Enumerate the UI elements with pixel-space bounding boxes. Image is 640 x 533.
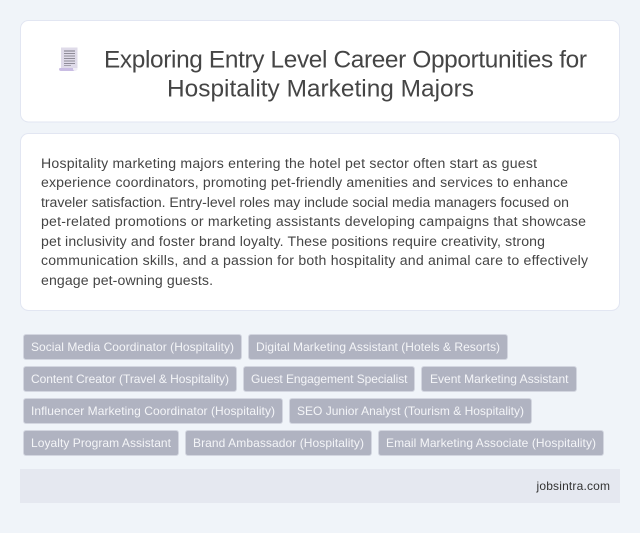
title: Hospitality Marketing Majors (167, 76, 474, 102)
tag (24, 334, 242, 360)
title (104, 46, 587, 102)
tag: Email Marketing Associate (Hospitality) (386, 436, 596, 450)
tag (24, 398, 282, 424)
text block: description: pet inclusivity and foster brand loyalty. These positions require creativity, strong (41, 233, 545, 249)
tag: Content Creator (Travel & Hospitality) (31, 372, 229, 386)
footer (20, 469, 620, 503)
text block: description: pet-related promotions or marketing assistants developing campaigns that showcase (41, 213, 586, 229)
tag (24, 366, 236, 392)
text block: description: communication skills, and a passion for both hospitality and animal care to effectively (41, 252, 589, 268)
tag (186, 430, 372, 456)
panel: header (20, 20, 620, 122)
tag (248, 334, 508, 360)
text block: description: traveler satisfaction. Entry-level roles may include social media managers focused on (41, 194, 569, 210)
text block: description: Hospitality marketing majors entering the hotel pet sector often start as guest (41, 155, 537, 171)
title: Exploring Entry Level Career Opportunities for (104, 46, 587, 74)
text block: description: experience coordinators, promoting pet-friendly amenities and services to enhance (41, 174, 568, 190)
footer text: jobsintra.com (536, 479, 610, 493)
tag: Brand Ambassador (Hospitality) (193, 436, 364, 450)
tag: Loyalty Program Assistant (31, 436, 172, 450)
text block: description: engage pet-owning guests. (41, 272, 213, 288)
text block: description (41, 155, 589, 288)
panel: description (20, 134, 620, 310)
tag: Guest Engagement Specialist (251, 372, 408, 386)
tag: Social Media Coordinator (Hospitality) (31, 340, 234, 354)
tag: Digital Marketing Assistant (Hotels & Resorts) (256, 340, 500, 354)
tag: Event Marketing Assistant (430, 372, 569, 386)
tags: job titles (24, 334, 604, 456)
tag (24, 430, 178, 456)
icon: document scroll (59, 48, 78, 71)
tag (244, 366, 414, 392)
tag (290, 398, 532, 424)
tag: Influencer Marketing Coordinator (Hospitality) (31, 404, 275, 418)
tag (378, 430, 604, 456)
tag: SEO Junior Analyst (Tourism & Hospitality) (297, 404, 524, 418)
tag (422, 366, 576, 392)
